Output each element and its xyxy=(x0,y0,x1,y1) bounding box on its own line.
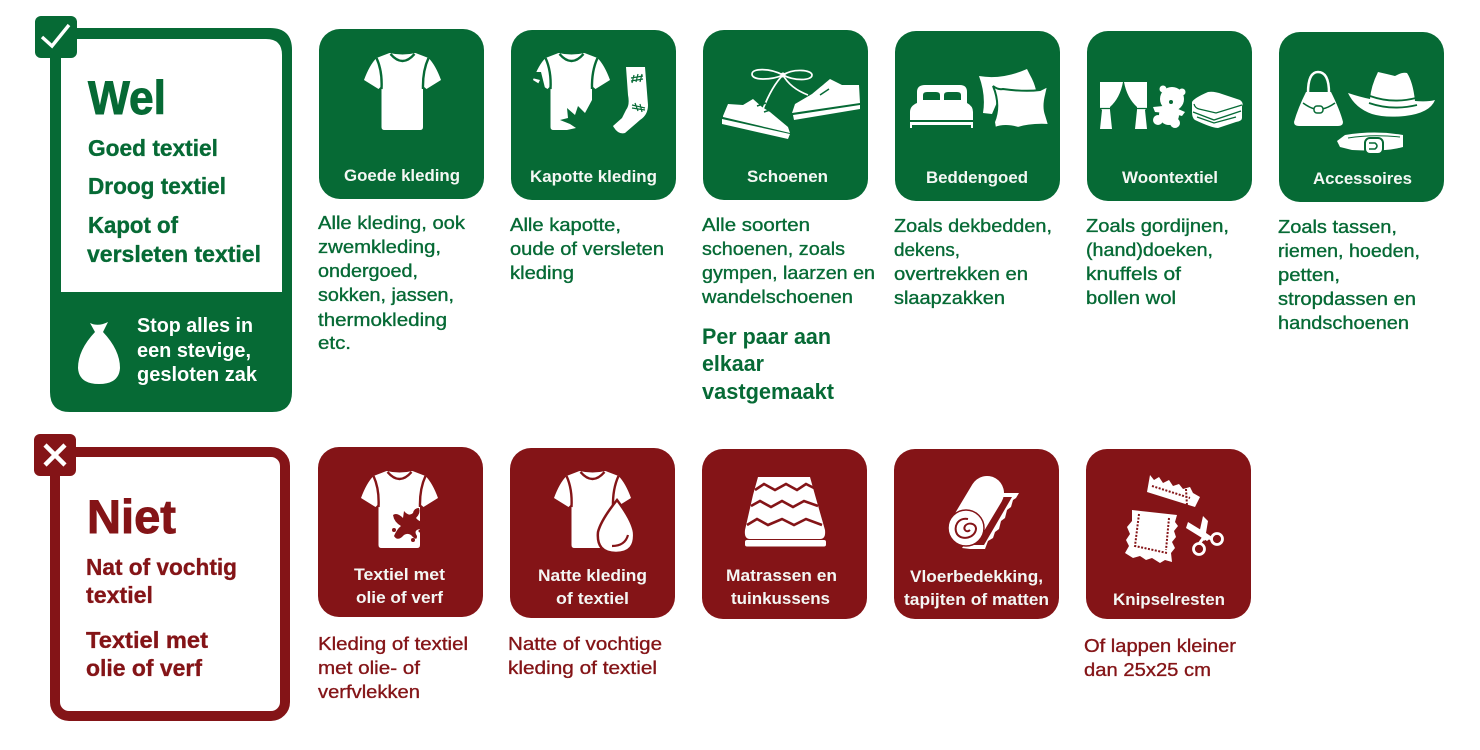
text: goede kleding description: zwemkleding, xyxy=(318,236,441,257)
icon: bed and pillows xyxy=(910,69,1049,128)
text: wel criteria: versleten textiel xyxy=(87,241,261,267)
text: wel criteria: Kapot of xyxy=(88,212,178,238)
tile: goede kleding xyxy=(319,29,484,199)
text: woontextiel description: (hand)doeken, xyxy=(1086,239,1213,260)
text: goede kleding description: Alle kleding, ook xyxy=(318,212,466,233)
icon: scraps and scissors xyxy=(1125,475,1222,563)
icon: cross mark xyxy=(34,434,76,476)
label: textiel met olie of verf: Textiel met xyxy=(354,565,445,584)
tile: knipselresten xyxy=(1086,449,1251,619)
panel: wel xyxy=(35,16,292,412)
text: niet criteria: Nat of vochtig xyxy=(86,554,237,580)
text: wel criteria xyxy=(87,135,261,267)
text: kapotte kleding description xyxy=(510,214,664,283)
text: accessoires description: riemen, hoeden, xyxy=(1278,240,1420,261)
tile: vloerbedekking, tapijten of matten xyxy=(894,449,1059,619)
text: kapotte kleding description: Alle kapotte, xyxy=(510,214,621,235)
icon: tied shoes xyxy=(722,70,860,139)
label: matrassen en tuinkussens xyxy=(726,566,837,608)
text: goede kleding description: etc. xyxy=(318,332,351,353)
label: kapotte kleding: Kapotte kleding xyxy=(530,167,657,186)
text: knipselresten description xyxy=(1084,635,1236,680)
text: goede kleding description: ondergoed, xyxy=(318,260,418,281)
icon: stained shirt xyxy=(361,471,438,548)
tile: textiel met olie of verf xyxy=(318,447,483,617)
text: knipselresten description: Of lappen kleiner xyxy=(1084,635,1236,656)
text: accessoires description: petten, xyxy=(1278,264,1340,285)
panel: niet xyxy=(34,434,285,716)
icon: carpet roll xyxy=(948,493,1019,549)
text: kapotte kleding description: kleding xyxy=(510,262,574,283)
label: accessoires: Accessoires xyxy=(1313,169,1412,188)
text: niet criteria: olie of verf xyxy=(86,655,202,681)
text: schoenen description xyxy=(701,214,875,307)
text: natte kleding description: kleding of textiel xyxy=(508,657,657,678)
label: textiel met olie of verf xyxy=(354,565,445,607)
text: bag instruction: gesloten zak xyxy=(137,364,258,386)
text: schoenen description: wandelschoenen xyxy=(701,286,853,307)
text: natte kleding description xyxy=(508,633,662,678)
icon: t-shirt xyxy=(364,53,441,130)
icon: curtains, teddy and towels xyxy=(1100,82,1243,129)
text: accessoires description xyxy=(1278,216,1420,333)
heading: niet: Niet xyxy=(87,490,176,543)
text: niet criteria: textiel xyxy=(86,582,153,608)
label: goede kleding: Goede kleding xyxy=(344,166,460,185)
tile: matrassen en tuinkussens xyxy=(702,449,867,619)
label: knipselresten: Knipselresten xyxy=(1113,590,1225,609)
text: woontextiel description: bollen wol xyxy=(1086,287,1176,308)
text: schoenen description: schoenen, zoals xyxy=(702,238,845,259)
text: bag instruction: een stevige, xyxy=(137,340,251,362)
text: schoenen description: Alle soorten xyxy=(702,214,810,235)
tile: kapotte kleding xyxy=(511,30,676,200)
label: natte kleding of textiel: of textiel xyxy=(556,589,629,608)
text: per paar aan elkaar vastgemaakt: Per paar aan xyxy=(702,324,831,349)
label: natte kleding of textiel xyxy=(538,566,647,608)
tile: natte kleding of textiel xyxy=(510,448,675,618)
text: beddengoed description: overtrekken en xyxy=(894,263,1028,284)
text: wel criteria: Goed textiel xyxy=(88,135,218,161)
text: olie of verf description: verfvlekken xyxy=(318,681,420,702)
tile: schoenen xyxy=(703,30,868,200)
label: schoenen: Schoenen xyxy=(747,167,828,186)
text: accessoires description: handschoenen xyxy=(1278,312,1409,333)
text: accessoires description: Zoals tassen, xyxy=(1278,216,1397,237)
label: textiel met olie of verf: olie of verf xyxy=(356,588,443,607)
text: schoenen description: gympen, laarzen en xyxy=(702,262,875,283)
text: beddengoed description xyxy=(894,215,1052,308)
tile: accessoires xyxy=(1279,32,1444,202)
icon: mattress xyxy=(745,477,826,546)
text: bag instruction xyxy=(137,315,258,386)
label: vloerbedekking, tapijten of matten: tapijten of matten xyxy=(904,590,1049,609)
panel frame: wel xyxy=(50,28,292,412)
text: beddengoed description: dekens, xyxy=(894,239,960,260)
text: beddengoed description: slaapzakken xyxy=(894,287,1005,308)
label: matrassen en tuinkussens: tuinkussens xyxy=(731,589,830,608)
text: natte kleding description: Natte of vochtige xyxy=(508,633,662,654)
tile: beddengoed xyxy=(895,31,1060,201)
text: olie of verf description xyxy=(318,633,468,702)
text: bag instruction: Stop alles in xyxy=(137,315,253,337)
icon: bag xyxy=(78,322,120,384)
label: vloerbedekking, tapijten of matten: Vloerbedekking, xyxy=(910,567,1043,586)
heading: wel: Wel xyxy=(88,71,166,124)
text: wel criteria: Droog textiel xyxy=(88,173,226,199)
text: olie of verf description: Kleding of textiel xyxy=(318,633,468,654)
text: woontextiel description: Zoals gordijnen, xyxy=(1086,215,1229,236)
icon: wet shirt with drop xyxy=(554,471,634,553)
label: beddengoed: Beddengoed xyxy=(926,168,1028,187)
text: accessoires description: stropdassen en xyxy=(1278,288,1416,309)
label: natte kleding of textiel: Natte kleding xyxy=(538,566,647,585)
panel frame: niet xyxy=(55,452,285,716)
label: matrassen en tuinkussens: Matrassen en xyxy=(726,566,837,585)
text: knipselresten description: dan 25x25 cm xyxy=(1084,659,1211,680)
tile: woontextiel xyxy=(1087,31,1252,201)
text: niet criteria: Textiel met xyxy=(86,627,208,653)
text: niet criteria xyxy=(86,554,237,681)
text: beddengoed description: Zoals dekbedden, xyxy=(894,215,1052,236)
text: woontextiel description: knuffels of xyxy=(1086,263,1182,284)
text: goede kleding description: thermokleding xyxy=(318,309,447,330)
icon: torn shirt and sock xyxy=(532,53,648,133)
text: kapotte kleding description: oude of versleten xyxy=(510,238,664,259)
text: goede kleding description xyxy=(318,212,466,353)
text: per paar aan elkaar vastgemaakt xyxy=(702,324,835,404)
label: vloerbedekking, tapijten of matten xyxy=(904,567,1049,609)
text: per paar aan elkaar vastgemaakt: elkaar xyxy=(702,351,764,376)
icon: bag, hat and belt xyxy=(1294,72,1435,154)
text: per paar aan elkaar vastgemaakt: vastgemaakt xyxy=(702,379,835,404)
label: woontextiel: Woontextiel xyxy=(1122,168,1218,187)
text: goede kleding description: sokken, jassen, xyxy=(318,284,454,305)
icon: check mark xyxy=(35,16,77,58)
text: olie of verf description: met olie- of xyxy=(318,657,421,678)
text: woontextiel description xyxy=(1086,215,1229,308)
